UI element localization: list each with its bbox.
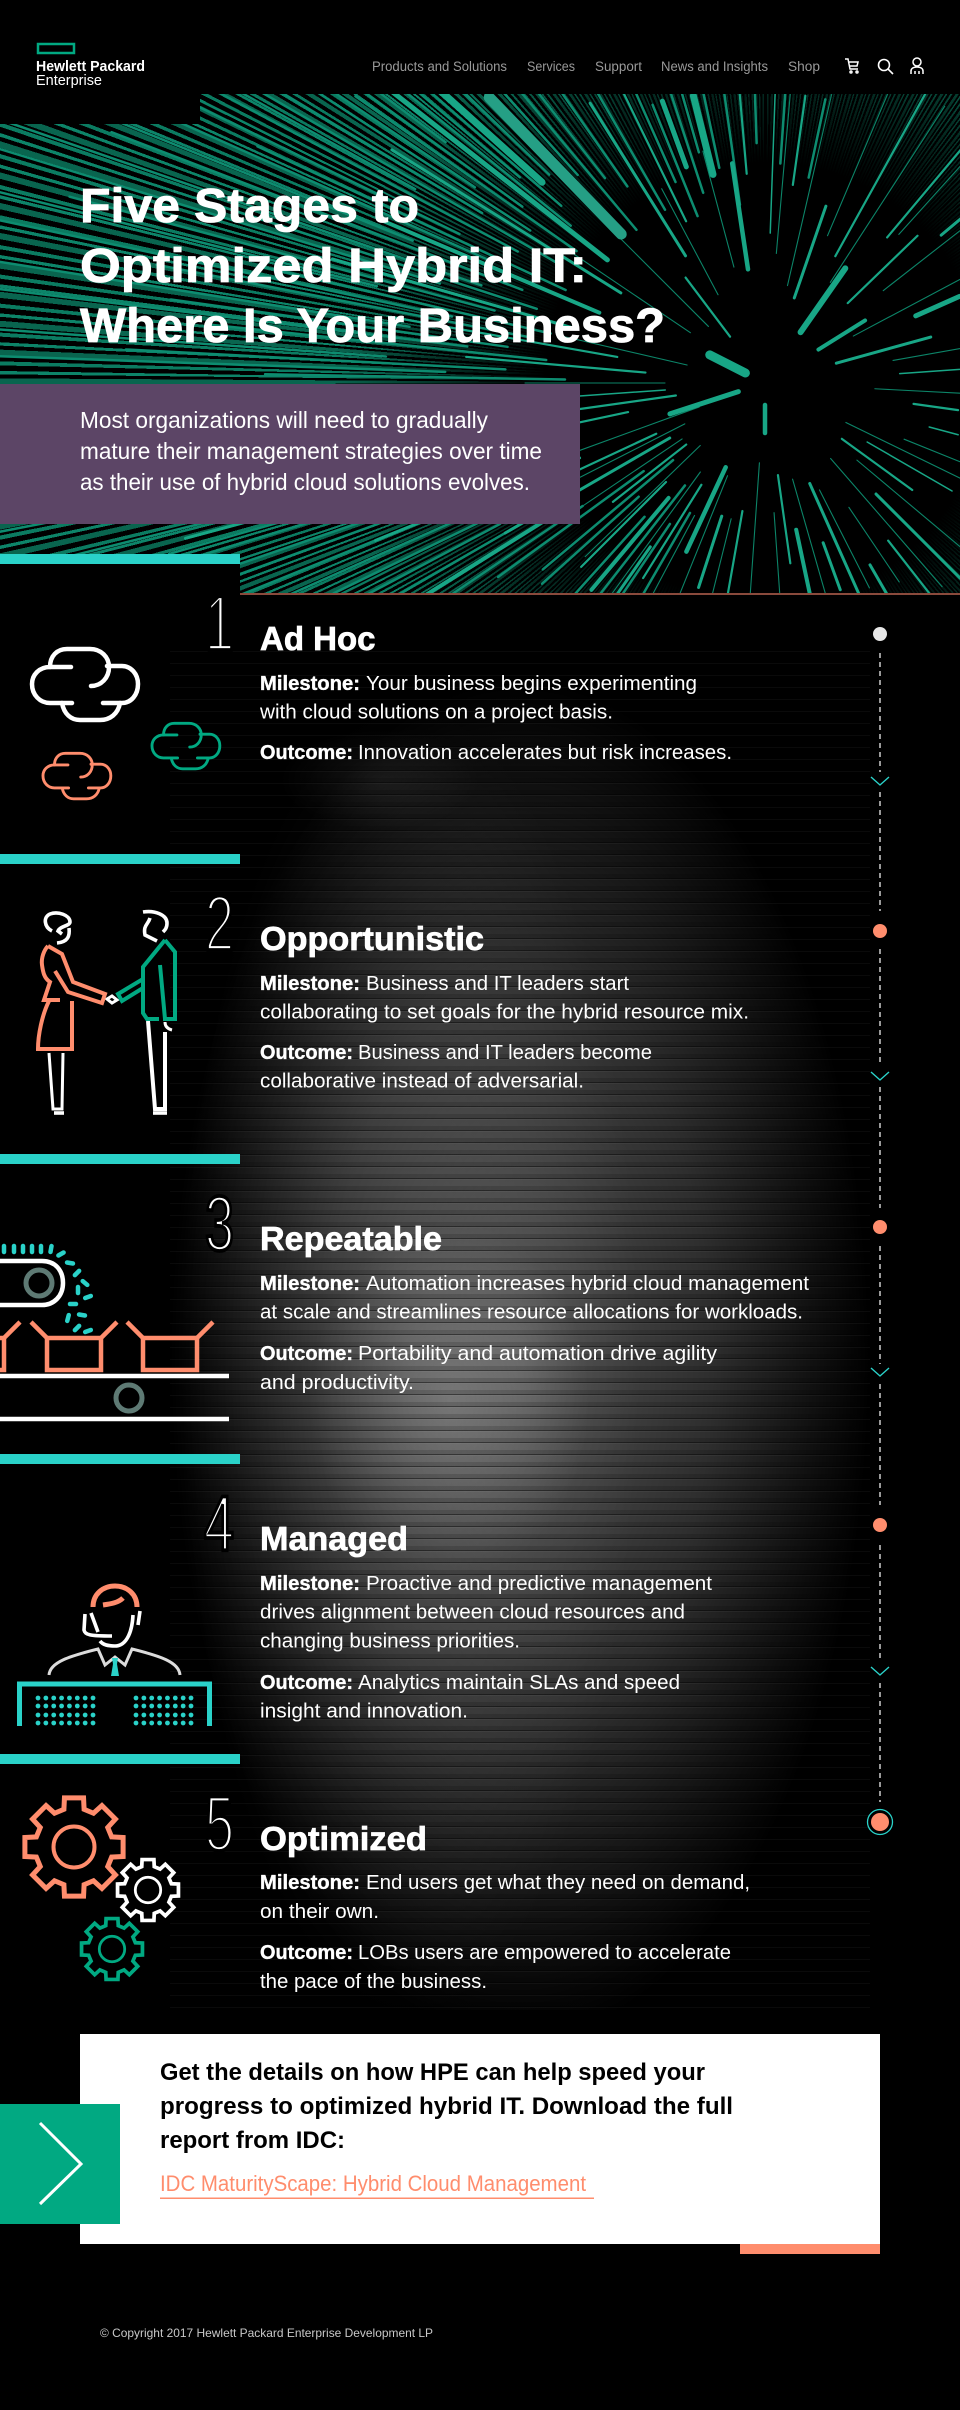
hero starburst streaks: [0, 94, 960, 593]
title: Optimized Hybrid IT:: [80, 240, 587, 293]
outcome: and productivity.: [260, 1372, 414, 1394]
number 4: 4: [204, 1479, 234, 1567]
heading: Repeatable: [260, 1220, 442, 1257]
number 5: 5: [205, 1779, 234, 1867]
outcome: Outcome:: [260, 1343, 353, 1365]
milestone: [260, 1872, 750, 1923]
heading: Managed: [260, 1520, 408, 1557]
milestone: [259, 673, 697, 724]
outcome: [260, 1343, 717, 1394]
icon: clouds: [32, 649, 220, 799]
milestone: Milestone:: [260, 673, 360, 695]
heading: Opportunistic: [260, 920, 484, 957]
outcome: Outcome:: [260, 1042, 353, 1064]
milestone: Your business begins experimenting: [366, 673, 697, 695]
logo notch: [0, 94, 200, 124]
milestone: Proactive and predictive management: [366, 1573, 712, 1595]
call to action text: report from IDC:: [160, 2127, 345, 2154]
milestone: Automation increases hybrid cloud management: [366, 1273, 809, 1295]
call to action text: progress to optimized hybrid IT. Download the full: [160, 2093, 733, 2120]
logo: Hewlett Packard Enterprise: Enterprise: [36, 72, 102, 89]
outcome: Outcome:: [260, 1672, 353, 1694]
logo: Hewlett Packard Enterprise: Hewlett Packard: [36, 58, 145, 75]
panel: intro: as their use of hybrid cloud solutions evolves.: [80, 469, 530, 495]
milestone: Milestone:: [260, 973, 360, 995]
heading: Optimized: [260, 1820, 427, 1857]
milestone: changing business priorities.: [260, 1630, 520, 1652]
icon: gears: [25, 1798, 178, 1979]
icon: cart: [845, 59, 858, 73]
outcome: insight and innovation.: [260, 1700, 468, 1722]
milestone: End users get what they need on demand,: [366, 1872, 750, 1894]
number 2: 2: [205, 879, 234, 967]
milestone: [260, 1273, 809, 1324]
milestone: drives alignment between cloud resources and: [260, 1602, 685, 1624]
outcome: Innovation accelerates but risk increases.: [358, 742, 732, 764]
milestone: at scale and streamlines resource allocations for workloads.: [260, 1302, 803, 1324]
panel: stage 4: [0, 1454, 712, 1726]
logo: Hewlett Packard Enterprise: [36, 44, 145, 89]
navigation: [372, 59, 820, 74]
number 1: 1: [205, 579, 234, 667]
icon: handshake: [38, 912, 175, 1113]
outcome: Portability and automation drive agility: [358, 1343, 717, 1365]
milestone: with cloud solutions on a project basis.: [259, 702, 613, 724]
copyright: © Copyright 2017 Hewlett Packard Enterprise Development LP: [100, 2326, 433, 2340]
outcome: collaborative instead of adversarial.: [260, 1070, 584, 1092]
black panel under first teal bar: [0, 560, 240, 596]
hero bottom rule: [240, 593, 960, 595]
link: IDC MaturityScape: Hybrid Cloud Management: [160, 2171, 586, 2196]
striped glow background behind the stages: [170, 640, 870, 2010]
navigation: Products and Solutions: [372, 59, 507, 74]
outcome: Analytics maintain SLAs and speed: [358, 1672, 680, 1694]
icon: user: [911, 58, 923, 74]
panel: stage 2: [0, 854, 749, 1113]
milestone: [260, 973, 749, 1024]
outcome: [260, 1672, 680, 1722]
call to action text: Get the details on how HPE can help speed your: [160, 2059, 705, 2086]
outcome: LOBs users are empowered to accelerate: [358, 1942, 731, 1964]
outcome: the pace of the business.: [260, 1971, 487, 1993]
milestone: Milestone:: [260, 1273, 360, 1295]
title: Five Stages to: [80, 180, 419, 233]
call to action text: [160, 2059, 733, 2154]
milestone: Milestone:: [260, 1573, 360, 1595]
panel: stage 3: [0, 1154, 809, 1419]
panel: intro: Most organizations will need to gradually: [80, 407, 488, 433]
navigation: Shop: [788, 59, 820, 74]
panel: stage 1: [0, 554, 732, 799]
timeline: [868, 627, 892, 1834]
icon: search: [878, 60, 893, 74]
milestone: Milestone:: [260, 1872, 360, 1894]
icon: conveyor belt with boxes: [0, 1246, 229, 1419]
navigation: Services: [527, 59, 575, 74]
outcome: Outcome:: [260, 742, 353, 764]
milestone: [260, 1573, 712, 1652]
outcome: Outcome:: [260, 1942, 353, 1964]
navigation: Support: [595, 59, 642, 74]
milestone: collaborating to set goals for the hybrid resource mix.: [260, 1002, 749, 1024]
icon: support agent at desk: [20, 1586, 210, 1726]
panel: call to action: [0, 2034, 880, 2254]
title: [80, 180, 665, 353]
horizontal stripe overlay: [170, 640, 870, 2010]
panel: stage 5: [0, 1754, 750, 1993]
title: Where Is Your Business?: [80, 300, 665, 353]
outcome: [260, 1942, 731, 1993]
panel: intro: mature their management strategies over time: [80, 438, 542, 464]
panel: intro: [0, 384, 580, 524]
outcome: Business and IT leaders become: [358, 1042, 652, 1064]
milestone: on their own.: [260, 1901, 379, 1923]
outcome: [260, 1042, 652, 1092]
milestone: Business and IT leaders start: [366, 973, 629, 995]
number 3: 3: [205, 1179, 234, 1267]
hero starburst background texture: [0, 94, 960, 593]
icon: chevron: [40, 2123, 81, 2204]
heading: Ad Hoc: [260, 620, 376, 657]
navigation: News and Insights: [661, 59, 768, 74]
